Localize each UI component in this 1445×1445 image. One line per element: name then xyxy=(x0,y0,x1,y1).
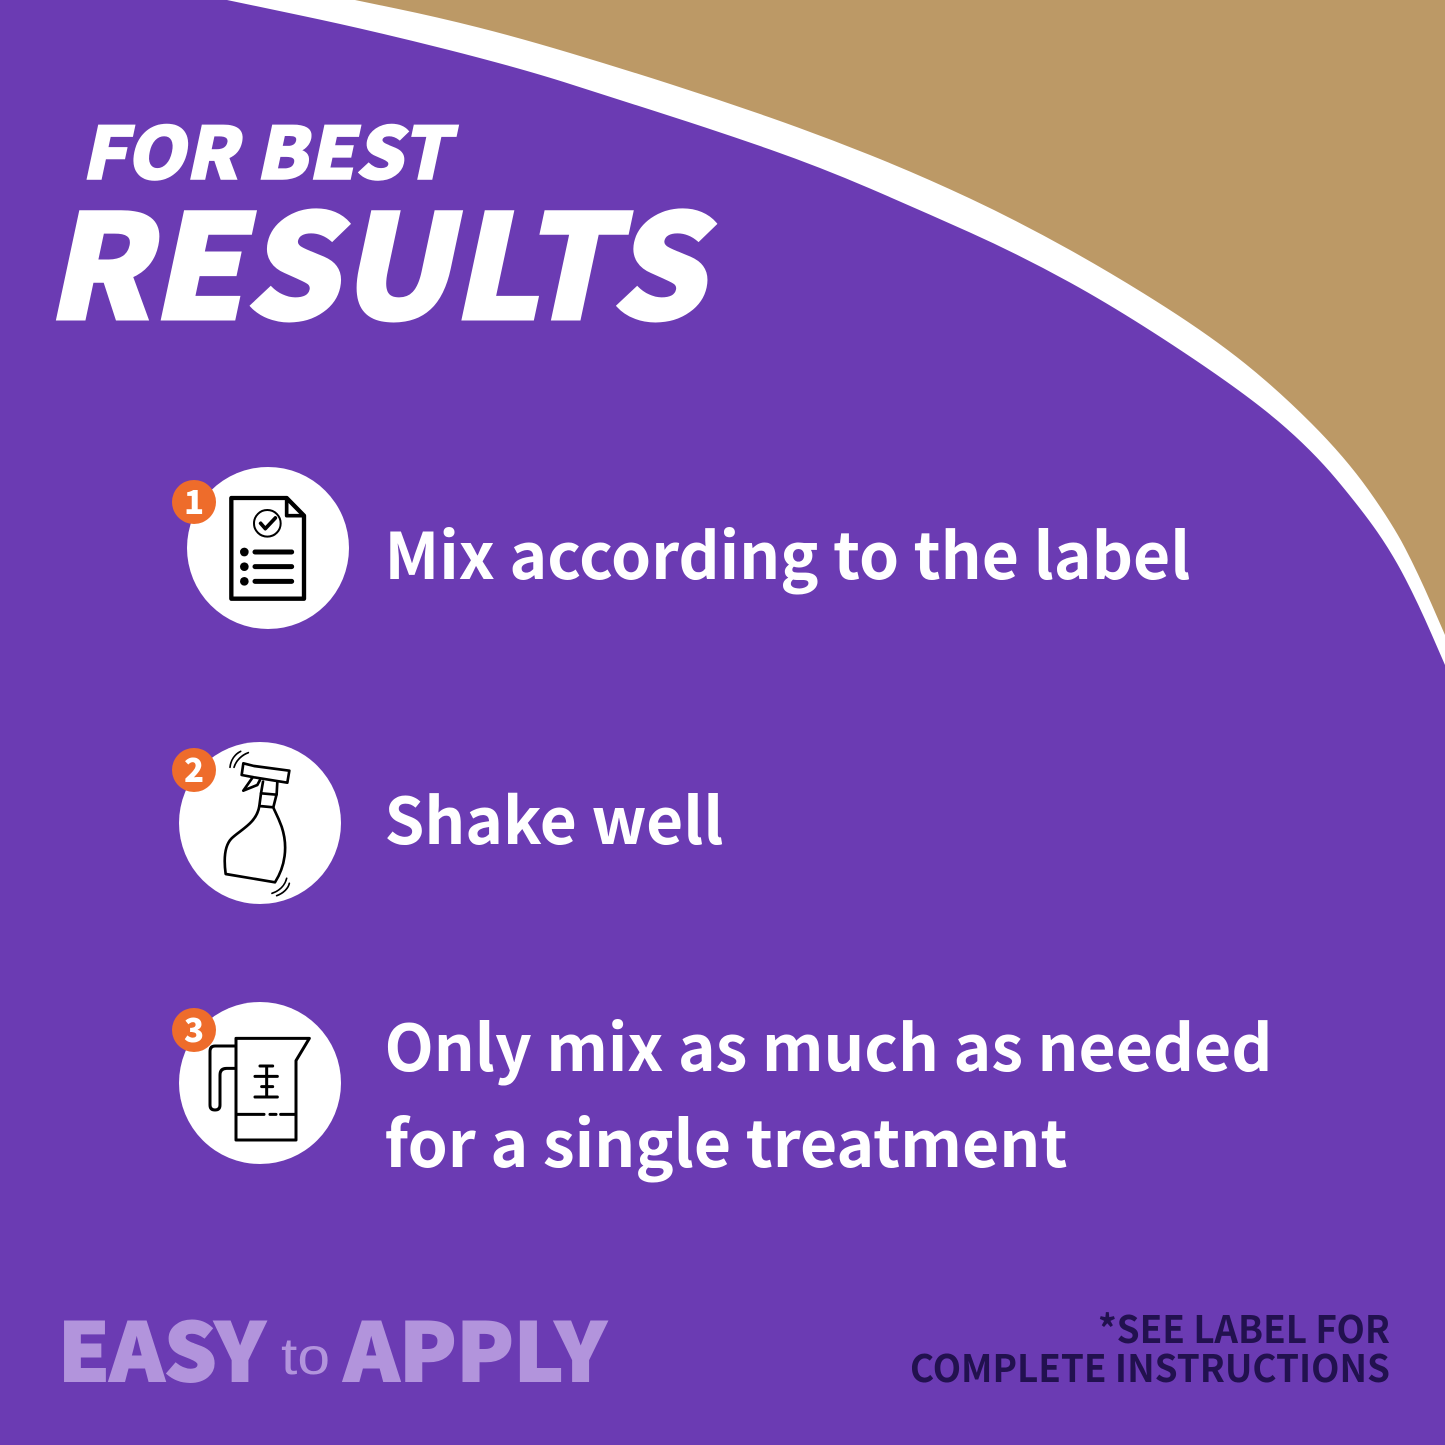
tagline: easy to apply xyxy=(58,1289,607,1405)
step 1: mix according to the label xyxy=(172,467,1190,629)
step 3 text: for a single treatment xyxy=(384,1094,1068,1186)
step 2 text: Shake well xyxy=(384,771,724,863)
badge 2 xyxy=(172,744,216,792)
icon: measuring jug xyxy=(179,1002,341,1164)
step 3 text xyxy=(384,998,1272,1186)
step 3: only mix as much as needed xyxy=(172,998,1272,1186)
footnote: COMPLETE INSTRUCTIONS xyxy=(910,1338,1390,1393)
step 1 text: Mix according to the label xyxy=(384,506,1190,598)
icon: document checklist xyxy=(187,467,349,629)
badge 2: 2 xyxy=(184,744,204,792)
step 2: shake well xyxy=(172,742,724,904)
badge 1: 1 xyxy=(184,476,204,524)
white curved band xyxy=(227,0,1445,665)
tagline: easy to apply: EASY xyxy=(58,1289,266,1405)
tagline: easy to apply: APPLY xyxy=(343,1289,607,1405)
badge 1 xyxy=(172,476,216,524)
title: FOR BEST xyxy=(77,96,467,200)
badge 3: 3 xyxy=(184,1004,204,1052)
badge 3 xyxy=(172,1004,216,1052)
step 3 text: Only mix as much as needed xyxy=(384,998,1272,1090)
title: RESULTS xyxy=(36,152,740,361)
icon: spray bottle xyxy=(179,742,341,904)
footnote xyxy=(910,1299,1390,1393)
footnote: *SEE LABEL FOR xyxy=(1098,1299,1390,1354)
tagline: easy to apply: to xyxy=(281,1328,330,1386)
tan corner panel xyxy=(355,0,1445,635)
